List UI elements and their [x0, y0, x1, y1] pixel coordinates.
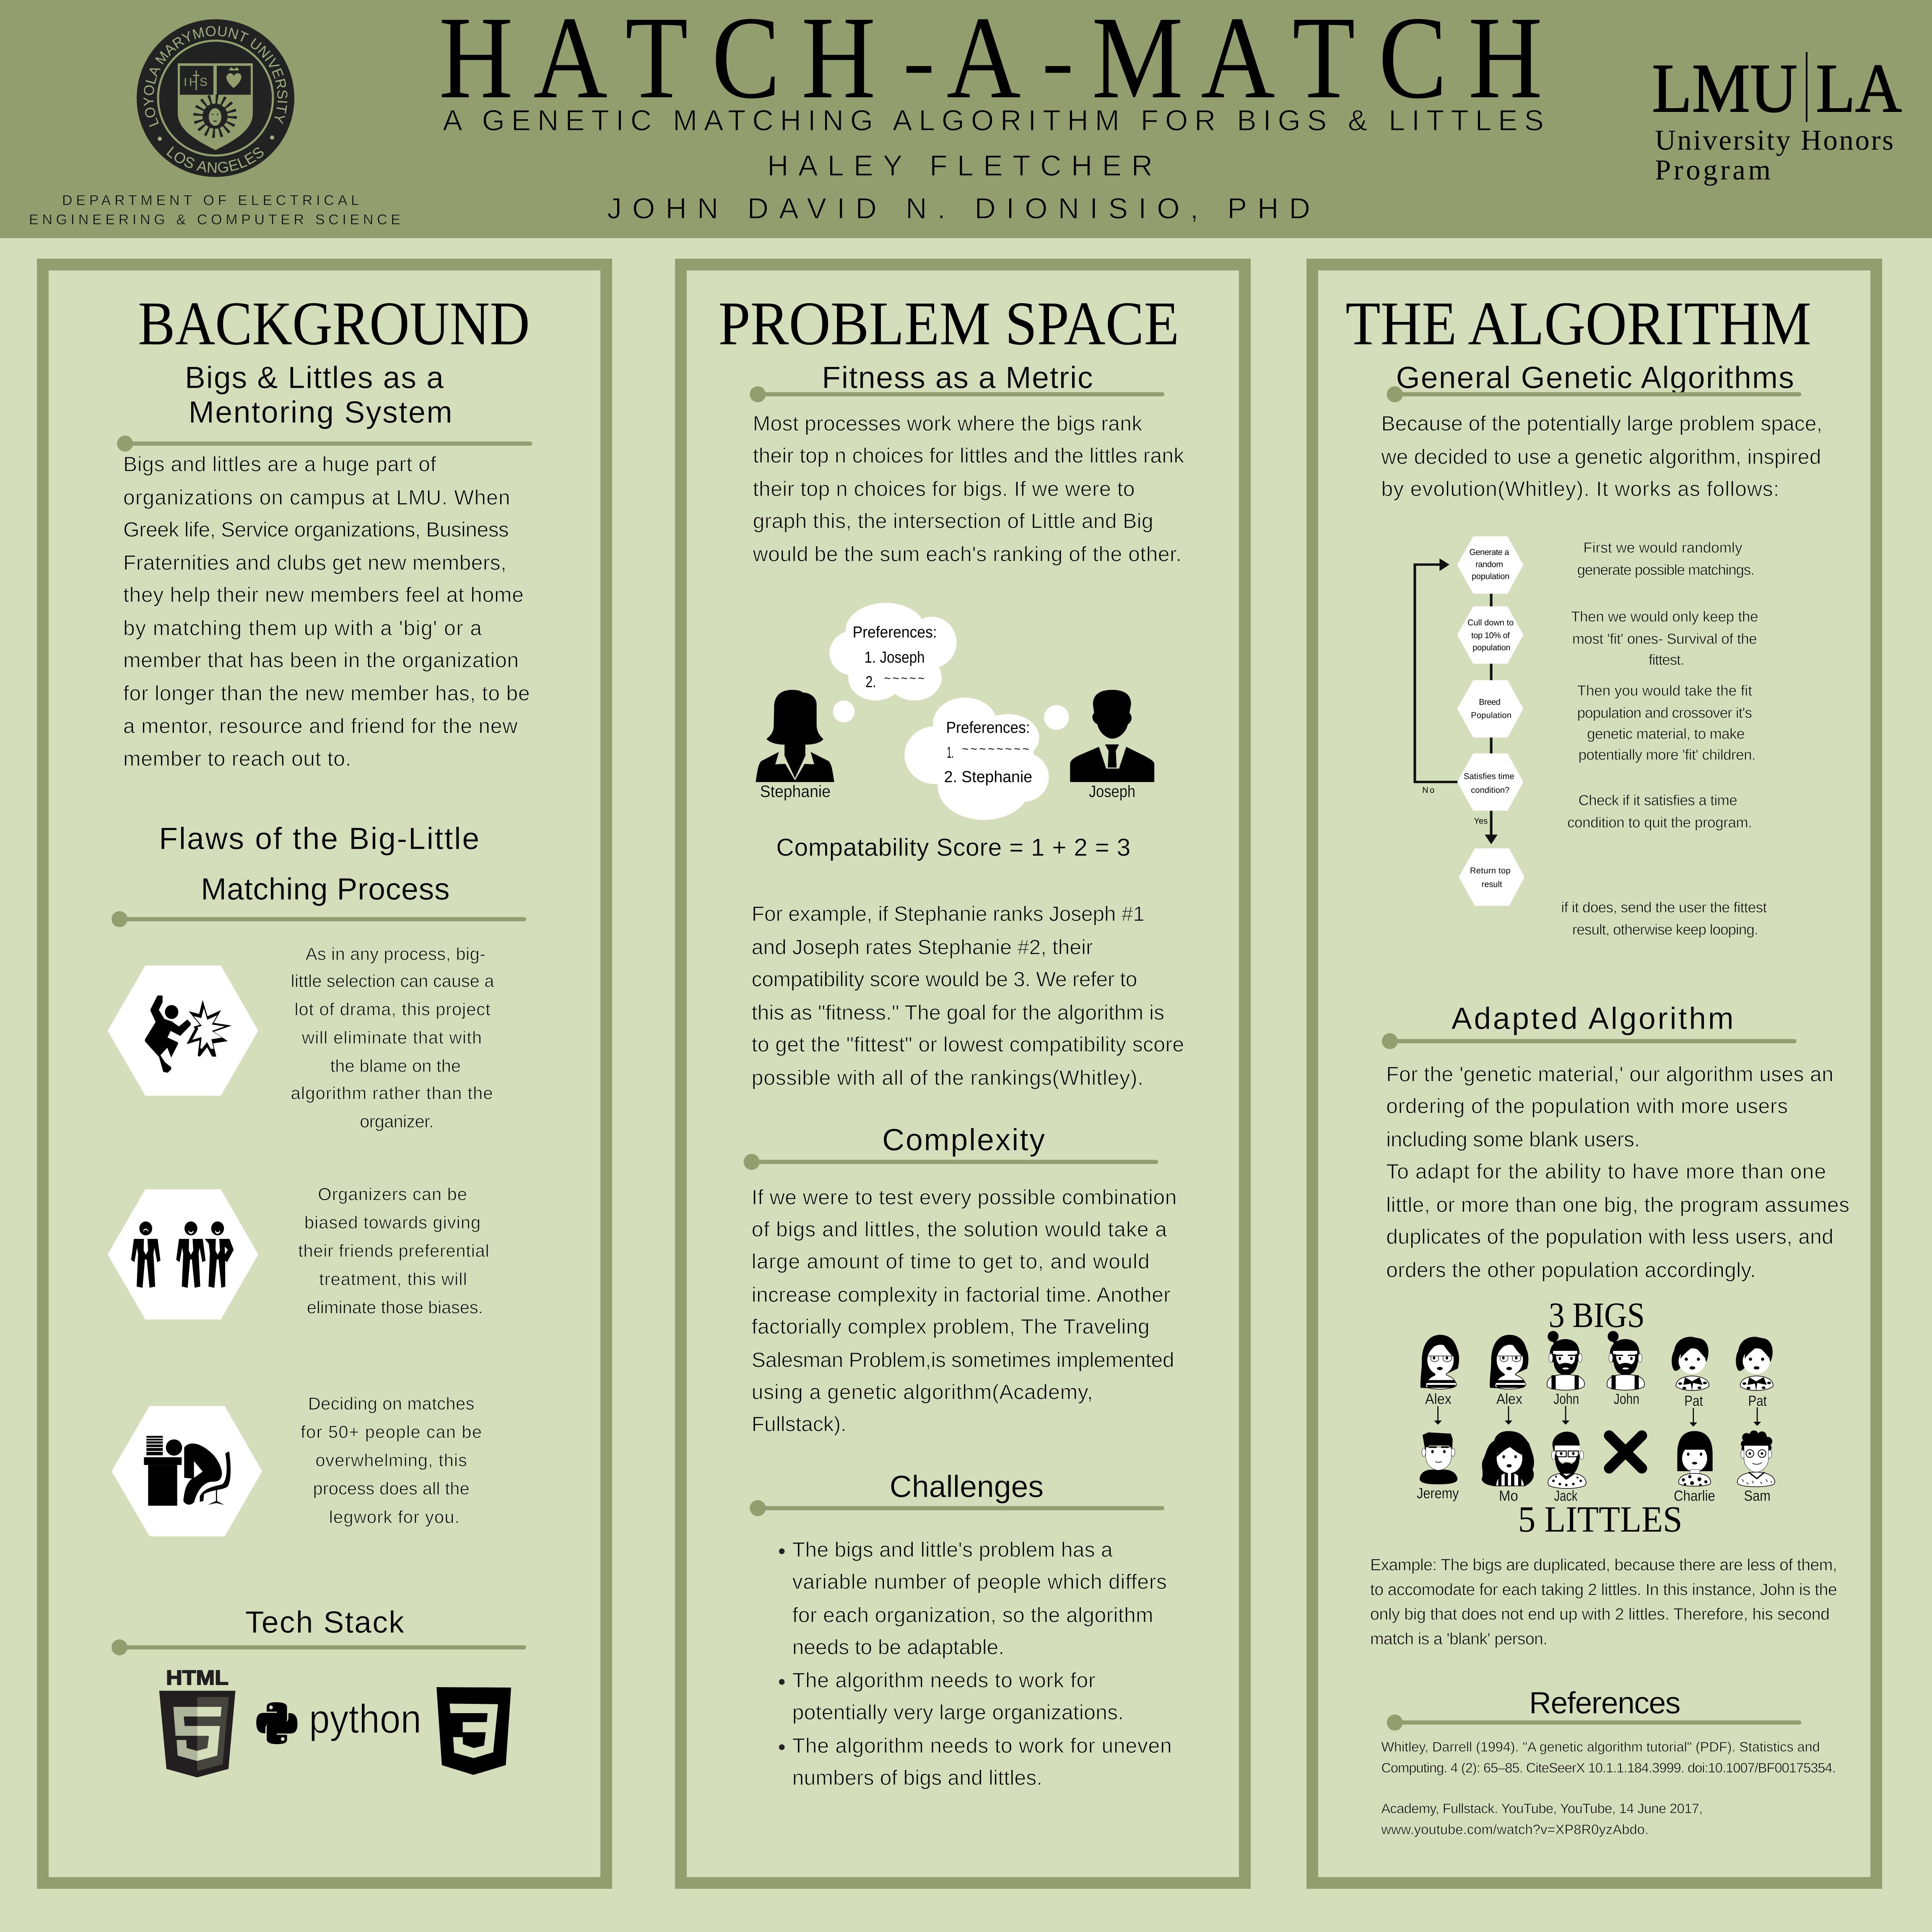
flow labels: result	[1482, 881, 1502, 889]
text: drama flaw: algorithm rather than the	[291, 1084, 493, 1104]
text: references: Academy, Fullstack. YouTube, YouTube, 14 June 2017,	[1381, 1802, 1703, 1817]
text: overwhelm flaw	[301, 1395, 482, 1528]
flow descriptions: Then we would only keep the	[1571, 608, 1759, 625]
text: drama flaw: As in any process, big-	[306, 945, 486, 965]
labels: little names: Sam	[1744, 1487, 1771, 1504]
flow labels: Return top	[1470, 867, 1511, 876]
heading: 5 littles: 5 LITTLES	[1518, 1499, 1683, 1540]
logo: python wordmark: python	[309, 1696, 421, 1742]
cross: unmatched big	[1609, 1436, 1642, 1468]
text: references: www.youtube.com/watch?v=XP8R0yzAbdo.	[1380, 1823, 1649, 1838]
text: bias flaw: their friends preferential	[298, 1242, 489, 1262]
flow labels: top 10% of	[1471, 632, 1510, 641]
department name: ENGINEERING & COMPUTER SCIENCE	[29, 212, 400, 228]
labels: little names: Jack	[1554, 1487, 1579, 1504]
flow labels	[1422, 549, 1514, 889]
text: fitness example: this as "fitness." The goal for the algorithm is	[752, 1001, 1164, 1025]
logo: LMU LA University Honors Program: LA	[1816, 49, 1902, 127]
text: complexity description: Fullstack).	[752, 1413, 847, 1436]
subheading: flaws: Matching Process	[201, 873, 450, 907]
text: Joseph preferences: 2. Stephanie	[944, 767, 1032, 786]
text: complexity description: If we were to test every possible combination	[752, 1186, 1177, 1209]
text: fitness example: possible with all of the rankings(Whitley).	[752, 1067, 1143, 1090]
labels: big names: Alex	[1425, 1390, 1452, 1408]
text: fitness description: their top n choices for bigs. If we were to	[753, 478, 1135, 501]
text: example: only big that does not end up with 2 littles. Therefore, his second	[1370, 1605, 1830, 1623]
text: bigs and littles description: for longer than the new member has, to be	[123, 682, 530, 705]
list: challenges: The algorithm needs to work for	[792, 1669, 1096, 1692]
text: bigs and littles description: member that has been in the organization	[123, 649, 519, 672]
avatar: Jeremy	[1420, 1432, 1457, 1484]
flow labels: Cull down to	[1467, 619, 1514, 628]
flowchart	[1415, 536, 1768, 938]
list: challenges: potentially very large organizations.	[792, 1701, 1124, 1724]
text: bigs and littles description: member to reach out to.	[123, 747, 351, 771]
heading: 3 bigs: 3 BIGS	[1549, 1296, 1645, 1336]
list: challenges	[779, 1538, 1172, 1790]
text: complexity description: of bigs and littles, the solution would take a	[752, 1218, 1168, 1241]
text: fitness description: graph this, the intersection of Little and Big	[753, 509, 1153, 533]
icon: Joseph silhouette	[1070, 690, 1154, 782]
rule	[117, 436, 530, 452]
text: Joseph preferences: ~~~~~~~~	[962, 743, 1030, 756]
logo: python snakes	[256, 1702, 297, 1744]
avatar: Charlie	[1678, 1431, 1713, 1486]
text: adapted algorithm description: duplicates of the population with less users, and	[1386, 1226, 1833, 1249]
list: challenges: needs to be adaptable.	[792, 1636, 1004, 1659]
text: fitness example: to get the "fittest" or lowest compatibility score	[752, 1033, 1184, 1057]
text: fitness example: and Joseph rates Stephanie #2, their	[752, 936, 1093, 959]
subheading: tech stack: Tech Stack	[245, 1605, 405, 1640]
list: challenges: The bigs and little's problem has a	[792, 1538, 1113, 1562]
text: example: match is a 'blank' person.	[1370, 1630, 1548, 1648]
diagram: bigs and littles avatars	[1420, 1331, 1775, 1488]
logo: HTML5 shield	[159, 1691, 235, 1777]
avatar: Mo	[1482, 1431, 1534, 1486]
flow descriptions: genetic material, to make	[1587, 725, 1745, 743]
text: fitness example	[752, 903, 1184, 1090]
text: complexity description: large amount of time to get to, and would	[752, 1250, 1150, 1273]
flow descriptions: potentially more 'fit' children.	[1579, 746, 1756, 763]
text: complexity description: using a genetic algorithm(Academy,	[752, 1381, 1093, 1404]
text: fitness description: their top n choices for littles and the littles rank	[753, 444, 1185, 467]
subheading: general genetic algorithms: General Genetic Algorithms	[1396, 361, 1794, 395]
flow descriptions: most 'fit' ones- Survival of the	[1572, 630, 1758, 647]
flow labels: Population	[1471, 712, 1512, 721]
text: adapted algorithm description	[1386, 1063, 1849, 1282]
flow descriptions: First we would randomly	[1583, 539, 1742, 556]
icon: overwhelmed at desk	[112, 1406, 262, 1536]
text: bias flaw: eliminate those biases.	[307, 1298, 483, 1318]
text: bigs and littles description: Fraternities and clubs get new members,	[123, 551, 506, 575]
flow labels: population	[1472, 644, 1511, 653]
heading: problem space: PROBLEM SPACE	[718, 289, 1179, 358]
flow descriptions: Check if it satisfies a time	[1579, 792, 1738, 809]
text: adapted algorithm description: orders the other population accordingly.	[1386, 1259, 1756, 1282]
text: references	[1380, 1740, 1836, 1838]
panel: problem space	[681, 265, 1245, 1883]
subheading: fitness: Fitness as a Metric	[822, 361, 1093, 395]
text: overwhelm flaw: for 50+ people can be	[301, 1423, 482, 1443]
icon: biased organizers	[108, 1189, 258, 1319]
arrows: bigs to littles	[1434, 1406, 1761, 1427]
flow descriptions: population and crossover it's	[1577, 704, 1752, 722]
text: bias flaw: biased towards giving	[304, 1214, 480, 1233]
header band	[0, 0, 1932, 238]
text: adapted algorithm description: For the 'genetic material,' our algorithm uses an	[1386, 1063, 1833, 1086]
hexagon nodes	[1457, 536, 1524, 906]
rule	[750, 1500, 1162, 1516]
panel: the algorithm	[1312, 265, 1876, 1883]
flow descriptions	[1561, 539, 1768, 938]
rule	[112, 1639, 524, 1655]
rule	[744, 1154, 1156, 1170]
list: challenges: The algorithm needs to work for uneven	[792, 1734, 1172, 1758]
thought bubble: Joseph	[904, 698, 1069, 820]
text: example	[1370, 1555, 1837, 1648]
text: overwhelm flaw: process does all the	[313, 1480, 470, 1499]
flow labels: No	[1422, 787, 1435, 795]
text: complexity description: increase complexity in factorial time. Another	[752, 1283, 1171, 1307]
logo: LMU LA University Honors Program	[1652, 49, 1902, 186]
text: bigs and littles description: they help their new members feel at home	[123, 584, 524, 607]
logo: Loyola Marymount University seal: IHS	[184, 75, 210, 88]
text: fitness description: would be the sum each's ranking of the other.	[752, 543, 1182, 566]
subtitle: A GENETIC MATCHING ALGORITHM FOR BIGS & LITTLES	[443, 104, 1544, 137]
rule	[1382, 1033, 1794, 1049]
panel: background	[43, 265, 606, 1883]
text: Stephanie preferences: 2.	[865, 673, 876, 691]
flow labels: Yes	[1474, 818, 1488, 826]
text: bigs and littles description: organizations on campus at LMU. When	[123, 486, 510, 509]
labels: big names: John	[1614, 1390, 1639, 1408]
avatar: Sam	[1737, 1431, 1775, 1487]
subheading: challenges: Challenges	[890, 1470, 1044, 1504]
author: HALEY FLETCHER	[767, 149, 1153, 182]
logo: LMU LA University Honors Program: Program	[1655, 154, 1771, 186]
text: references: Whitley, Darrell (1994). "A genetic algorithm tutorial" (PDF). Statistics and	[1381, 1740, 1820, 1755]
text: genetic algorithm intro: Because of the potentially large problem space,	[1381, 412, 1822, 436]
text: Stephanie preferences: Preferences:	[853, 623, 937, 641]
text: drama flaw: the blame on the	[330, 1057, 461, 1077]
text: bigs and littles description	[123, 453, 530, 771]
icons: flaw hexagons	[108, 966, 262, 1536]
labels: big names	[1425, 1390, 1768, 1410]
department name: DEPARTMENT OF ELECTRICAL	[62, 192, 359, 208]
label: Joseph: Joseph	[1089, 782, 1135, 801]
subheading: flaws: Flaws of the Big-Little	[159, 822, 479, 856]
avatars: bigs	[1420, 1331, 1773, 1391]
text: fitness example: compatibility score would be 3. We refer to	[752, 968, 1137, 991]
subheading: references: References	[1529, 1686, 1680, 1721]
text: fitness description	[752, 412, 1185, 566]
text: genetic algorithm intro: we decided to use a genetic algorithm, inspired	[1380, 445, 1821, 469]
flow descriptions: if it does, send the user the fittest	[1561, 899, 1768, 916]
text: adapted algorithm description: ordering of the population with more users	[1386, 1095, 1788, 1118]
subheading: adapted algorithm: Adapted Algorithm	[1452, 1002, 1734, 1036]
text: overwhelm flaw: Deciding on matches	[308, 1395, 474, 1415]
icon: Stephanie silhouette	[756, 690, 834, 782]
label: Stephanie: Stephanie	[760, 782, 831, 801]
flow labels: Breed	[1479, 699, 1501, 707]
labels: big names: Pat	[1684, 1392, 1703, 1410]
flow labels: Generate a	[1469, 549, 1509, 557]
text: bigs and littles description: by matching them up with a 'big' or a	[123, 617, 483, 640]
text: drama flaw: lot of drama, this project	[294, 1000, 491, 1020]
flow labels: Satisfies time	[1464, 773, 1514, 782]
text: Joseph preferences	[944, 718, 1032, 786]
labels: big names: John	[1553, 1390, 1579, 1408]
text: drama flaw: organizer.	[360, 1113, 434, 1132]
logo: Loyola Marymount University seal	[137, 19, 294, 177]
text: adapted algorithm description: little, or more than one big, the program assumes	[1386, 1193, 1849, 1217]
text: drama flaw	[291, 945, 494, 1132]
flow labels: condition?	[1471, 787, 1510, 795]
labels: little names: Charlie	[1674, 1487, 1716, 1504]
subheading: complexity: Complexity	[882, 1123, 1046, 1158]
flow descriptions: fittest.	[1649, 651, 1684, 668]
flow labels: population	[1472, 573, 1510, 582]
equation: compatibility score: Compatability Score = 1 + 2 = 3	[776, 835, 1130, 862]
text: adapted algorithm description: To adapt for the ability to have more than one	[1386, 1160, 1826, 1184]
advisor: JOHN DAVID N. DIONISIO, PHD	[607, 192, 1310, 225]
text: complexity description: Salesman Problem,is sometimes implemented	[752, 1348, 1174, 1372]
connectors and arrows	[1415, 558, 1498, 844]
list: challenges: variable number of people which differs	[792, 1570, 1167, 1594]
text: drama flaw: will eliminate that with	[301, 1029, 482, 1049]
logo: LMU LA University Honors Program: University Honors	[1655, 124, 1893, 156]
rule	[1387, 386, 1800, 402]
text: genetic algorithm intro	[1380, 412, 1822, 501]
text: fitness example: For example, if Stephanie ranks Joseph #1	[752, 903, 1145, 926]
text: bigs and littles description: Bigs and littles are a huge part of	[123, 453, 436, 476]
labels: little names: Jeremy	[1417, 1485, 1459, 1502]
text: overwhelm flaw: legwork for you.	[329, 1508, 460, 1528]
labels: little names	[1417, 1485, 1771, 1504]
text: example: Example: The bigs are duplicated, because there are less of them,	[1370, 1555, 1837, 1574]
text: example: to accomodate for each taking 2 littles. In this instance, John is the	[1370, 1580, 1837, 1599]
flow descriptions: generate possible matchings.	[1577, 561, 1755, 579]
avatar: Jack	[1548, 1432, 1586, 1488]
labels: little names: Mo	[1499, 1487, 1519, 1504]
subheading: bigs and littles	[185, 361, 452, 430]
rule	[112, 911, 524, 927]
labels: big names: Alex	[1496, 1390, 1522, 1408]
flow labels: random	[1475, 561, 1504, 570]
list: challenges: for each organization, so the algorithm	[792, 1604, 1153, 1627]
list: challenges: numbers of bigs and littles.	[792, 1766, 1042, 1790]
text: references: Computing. 4 (2): 65–85. CiteSeerX 10.1.1.184.3999. doi:10.1007/BF00175354.	[1381, 1761, 1836, 1776]
text: Stephanie preferences: ~~~~~	[884, 673, 925, 686]
text: bigs and littles description: Greek life, Service organizations, Business	[123, 518, 509, 542]
flow descriptions: condition to quit the program.	[1567, 814, 1752, 831]
thought bubble: Stephanie	[829, 603, 957, 722]
text: bias flaw	[298, 1185, 489, 1318]
text: fitness description: Most processes work where the bigs rank	[753, 412, 1143, 436]
logo: Loyola Marymount University seal: LOYOLA MARYMOUNT UNIVERSITY	[141, 23, 290, 129]
rule	[750, 386, 1162, 402]
department name	[29, 192, 400, 228]
text: Stephanie preferences	[853, 623, 937, 691]
rule	[1387, 1714, 1800, 1731]
text: complexity description: factorially complex problem, The Traveling	[752, 1315, 1150, 1339]
text: complexity description	[752, 1186, 1177, 1436]
text: bias flaw: Organizers can be	[318, 1185, 467, 1205]
text: genetic algorithm intro: by evolution(Whitley). It works as follows:	[1381, 478, 1779, 501]
subheading: flaws	[159, 822, 479, 907]
flow descriptions: result, otherwise keep looping.	[1572, 921, 1758, 938]
text: overwhelm flaw: overwhelming, this	[315, 1452, 467, 1471]
text: adapted algorithm description: including some blank users.	[1386, 1128, 1640, 1151]
heading: background: BACKGROUND	[138, 289, 530, 358]
logo: HTML text: HTML	[166, 1667, 229, 1689]
logo: CSS3 shield	[436, 1687, 511, 1775]
logo: Loyola Marymount University seal: LOS ANGELES	[163, 143, 268, 177]
logo: LMU LA University Honors Program: LMU	[1652, 49, 1797, 127]
text: bias flaw: treatment, this will	[319, 1270, 467, 1290]
text: Joseph preferences: 1.	[947, 743, 954, 761]
labels: big names: Pat	[1748, 1392, 1768, 1410]
flow descriptions: Then you would take the fit	[1577, 682, 1753, 699]
text: Joseph preferences: Preferences:	[946, 718, 1030, 737]
text: drama flaw: little selection can cause a	[291, 972, 494, 992]
icon: fighting figure	[108, 966, 258, 1096]
text: Stephanie preferences: 1. Joseph	[865, 648, 925, 667]
subheading: bigs and littles: Bigs & Littles as a	[185, 361, 444, 395]
subheading: bigs and littles: Mentoring System	[189, 395, 452, 430]
heading: the algorithm: THE ALGORITHM	[1345, 289, 1811, 358]
text: bigs and littles description: a mentor, resource and friend for the new	[123, 714, 518, 738]
